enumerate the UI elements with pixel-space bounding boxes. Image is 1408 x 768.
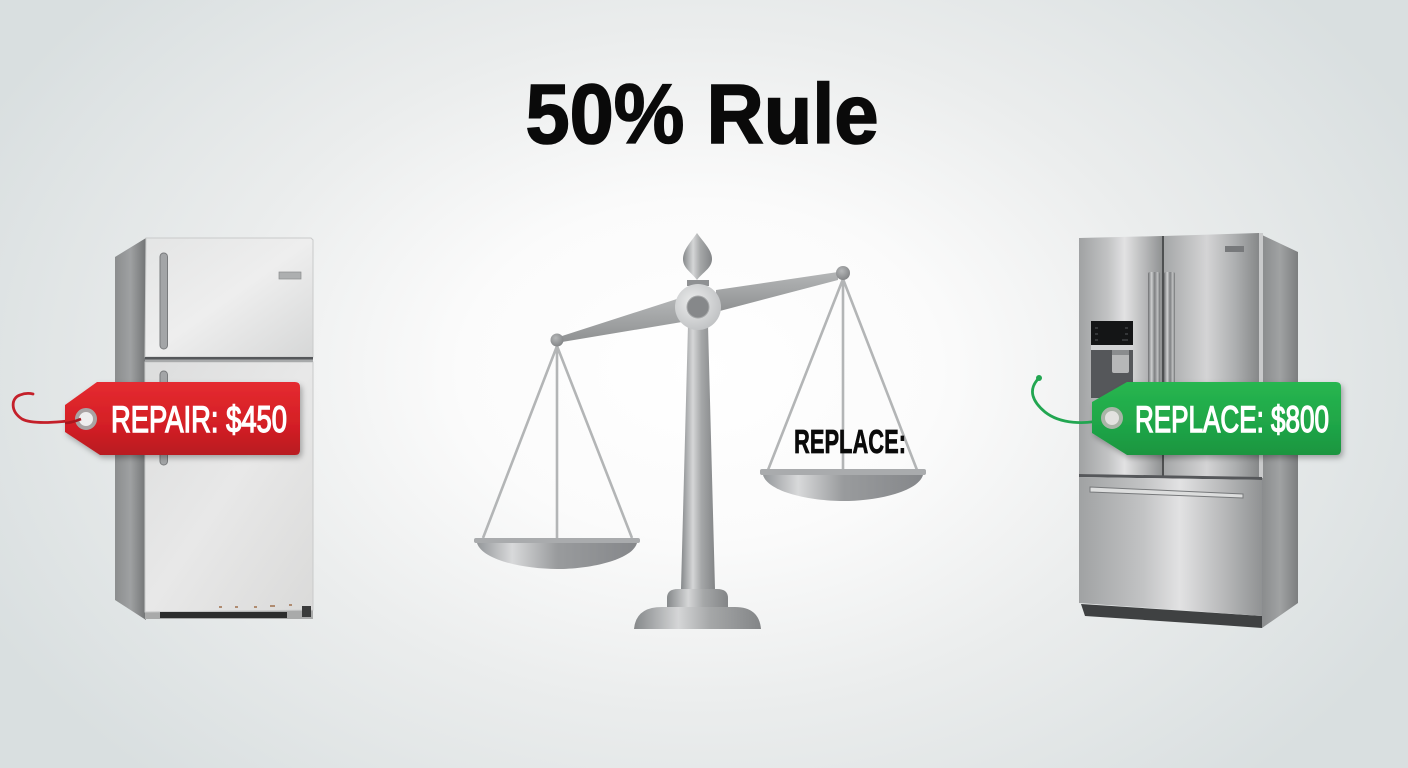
door handles <box>1148 272 1160 387</box>
icon: new stainless refrigerator <box>1079 233 1298 628</box>
icon: green replace price tag <box>1032 375 1341 455</box>
title: 50% Rule <box>526 67 878 161</box>
left pan <box>477 543 637 569</box>
tag label: REPLACE: $800 <box>1135 399 1329 440</box>
right pan <box>763 475 923 501</box>
tag string <box>13 393 84 422</box>
right pan strings <box>768 279 917 470</box>
base <box>667 589 728 607</box>
tag eyelet <box>1103 409 1121 427</box>
tag body <box>65 382 300 455</box>
finial <box>683 233 712 280</box>
beam end balls <box>550 334 564 346</box>
tag body <box>1092 382 1341 455</box>
tag eyelet <box>77 410 95 428</box>
water dispenser <box>1091 321 1133 398</box>
scale label: REPLACE: <box>794 424 906 461</box>
icon: red repair price tag <box>13 382 300 455</box>
icon: old refrigerator <box>115 238 313 620</box>
column <box>681 325 715 589</box>
icon: balance scale <box>474 233 926 629</box>
left pan strings <box>483 346 632 538</box>
pivot hub <box>675 284 721 330</box>
beam <box>562 298 682 342</box>
tag string <box>1032 378 1106 423</box>
tag label: REPAIR: $450 <box>111 399 287 440</box>
